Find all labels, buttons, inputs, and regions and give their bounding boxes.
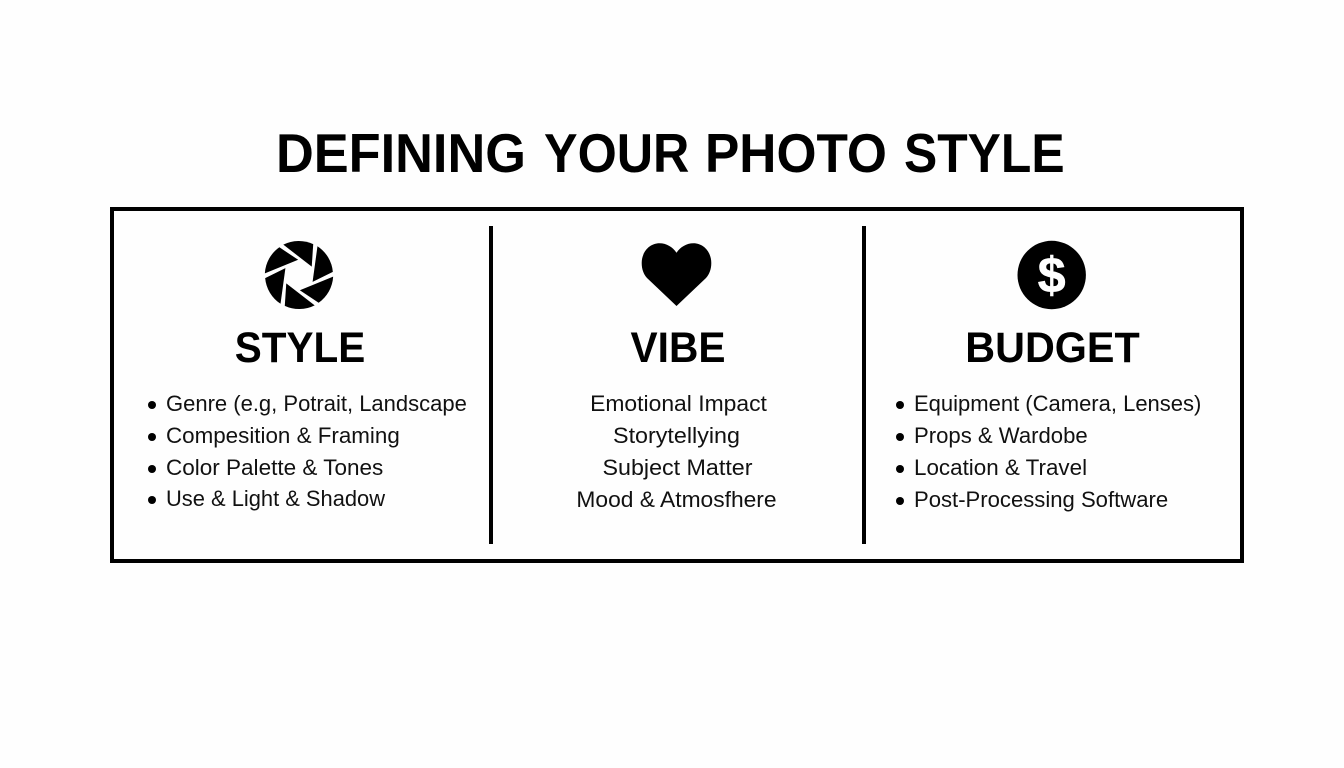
list: vibe items: Subject Matter — [603, 455, 752, 480]
heading: budget: BUDGET — [965, 325, 1140, 372]
list: style items — [148, 391, 467, 511]
icon: camera aperture — [264, 241, 334, 309]
icon: dollar coin — [1018, 240, 1086, 310]
title: YOUR — [544, 122, 689, 184]
list: budget items: Props & Wardobe — [914, 423, 1088, 448]
list: style items: Genre (e.g, Potrait, Landscape — [166, 391, 467, 416]
list: style items: Compesition & Framing — [166, 423, 400, 448]
list: budget items — [896, 391, 1201, 512]
list: vibe items: Emotional Impact — [590, 391, 767, 416]
panel: vibe — [576, 243, 777, 512]
divider: style and vibe — [488, 226, 492, 544]
icon: dollar coin: $ — [1038, 247, 1066, 303]
title — [276, 122, 1065, 184]
list: budget items: Equipment (Camera, Lenses) — [914, 391, 1201, 416]
heading: style: STYLE — [235, 325, 365, 372]
list: vibe items: Storytellying — [613, 423, 740, 448]
icon: heart — [642, 243, 712, 306]
list: style items: Use & Light & Shadow — [166, 486, 385, 511]
list: vibe items: Mood & Atmosfhere — [576, 487, 777, 512]
heading: vibe: VIBE — [631, 325, 725, 372]
panel: budget — [896, 240, 1201, 512]
main framed panel — [110, 207, 1244, 563]
panel: style — [148, 241, 467, 511]
title: DEFINING — [276, 122, 525, 184]
divider: vibe and budget — [862, 226, 866, 544]
list: budget items: Location & Travel — [914, 455, 1087, 480]
title: STYLE — [904, 122, 1065, 184]
list: vibe items — [576, 391, 777, 512]
list: budget items: Post-Processing Software — [914, 487, 1168, 512]
title: PHOTO — [704, 122, 886, 184]
list: style items: Color Palette & Tones — [166, 455, 383, 480]
